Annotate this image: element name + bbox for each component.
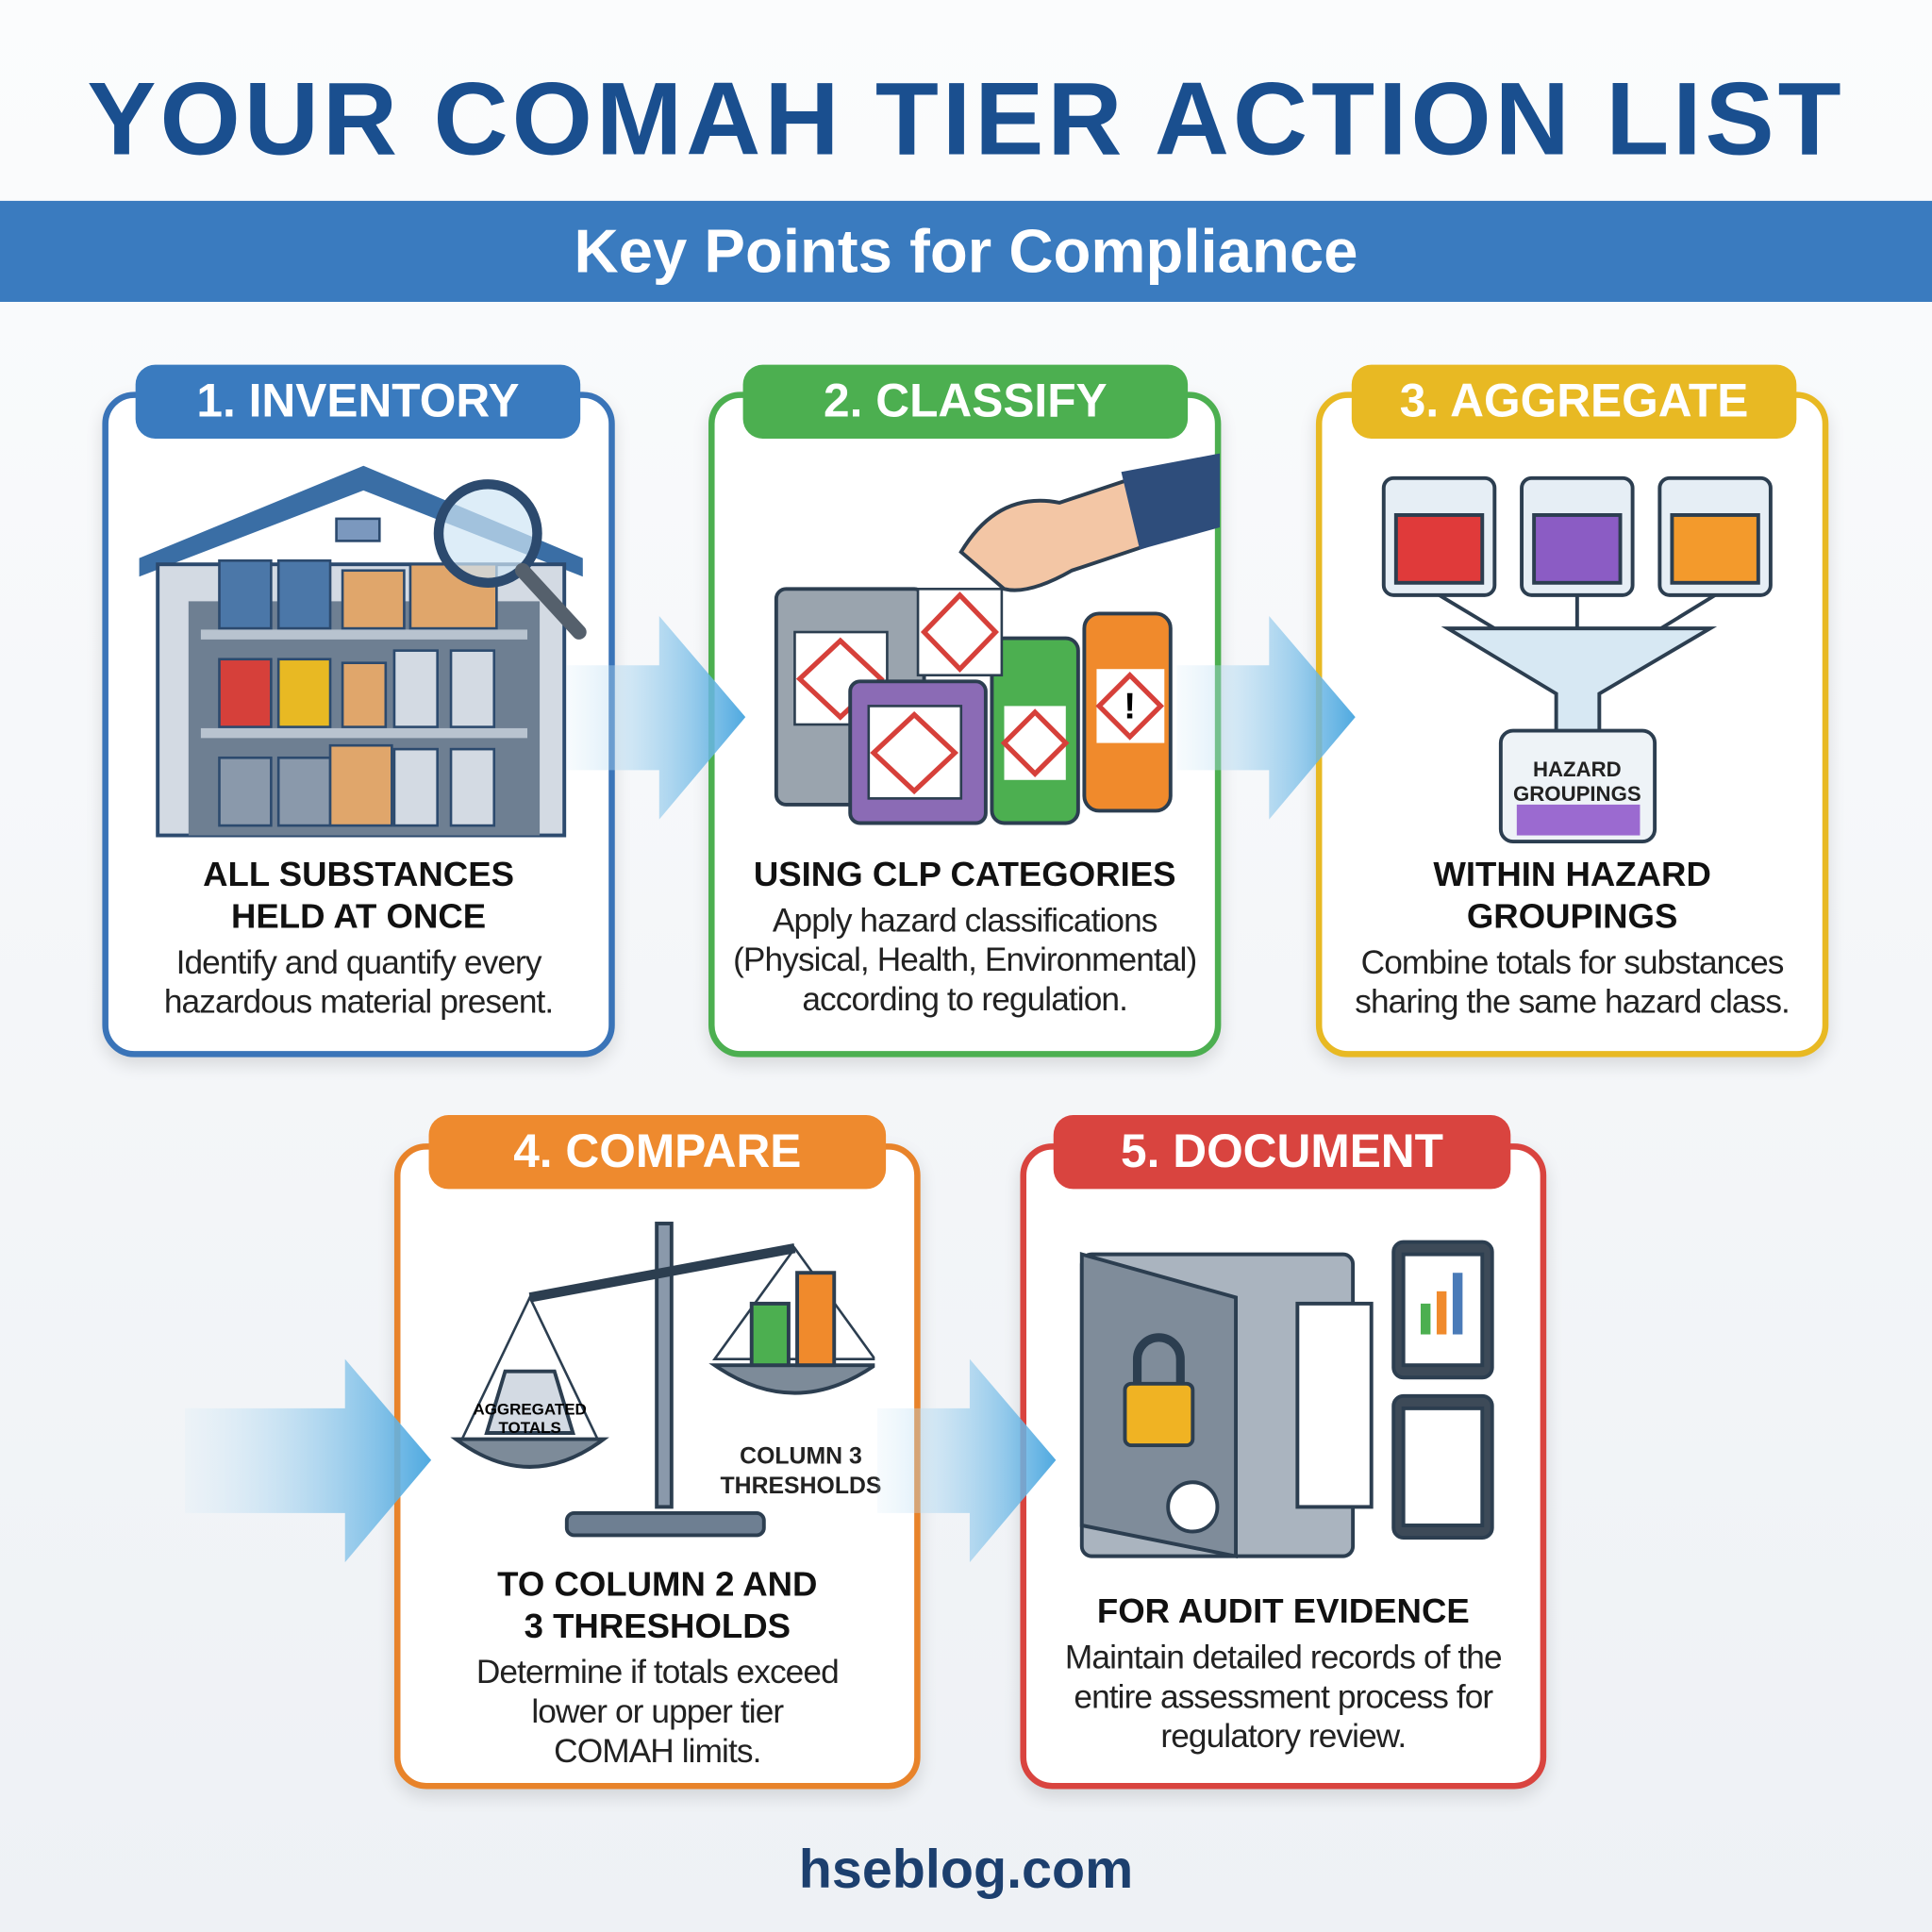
arrow: into 4 bbox=[197, 1358, 432, 1562]
subtitle band bbox=[0, 201, 1932, 302]
panel: document: entire assessment process for bbox=[1074, 1678, 1492, 1715]
panel: classify: (Physical, Health, Environmental) bbox=[733, 941, 1196, 978]
text: compare: 3 THRESHOLDS bbox=[525, 1607, 791, 1645]
label: column 3 thresholds: THRESHOLDS bbox=[720, 1474, 881, 1500]
text: inventory: ALL SUBSTANCES bbox=[203, 855, 514, 893]
panel: document: regulatory review. bbox=[1160, 1718, 1406, 1755]
tab: classify: 2. CLASSIFY bbox=[824, 375, 1108, 427]
tab: compare bbox=[429, 1115, 886, 1189]
text: compare: TO COLUMN 2 AND bbox=[497, 1565, 817, 1603]
tab: inventory: 1. INVENTORY bbox=[196, 375, 519, 427]
panel: compare: lower or upper tier bbox=[531, 1693, 783, 1730]
panel: document: Maintain detailed records of the bbox=[1065, 1639, 1502, 1675]
panel: inventory bbox=[102, 391, 615, 1058]
text: aggregate: WITHIN HAZARD bbox=[1433, 855, 1711, 893]
tab: inventory bbox=[136, 365, 580, 439]
panel: classify: Apply hazard classifications bbox=[773, 902, 1157, 939]
text: inventory: HELD AT ONCE bbox=[231, 897, 486, 935]
title: YOUR COMAH TIER ACTION LIST bbox=[87, 60, 1845, 176]
icon: scales: TOTALS bbox=[498, 1419, 561, 1437]
arrow: 2 to 3 bbox=[1177, 616, 1356, 819]
tab: classify bbox=[743, 365, 1188, 439]
tab: compare: 4. COMPARE bbox=[513, 1126, 801, 1178]
icon: CLP bottles bbox=[774, 453, 1220, 824]
panel: aggregate: Combine totals for substances bbox=[1361, 943, 1784, 981]
text: inventory bbox=[203, 855, 514, 935]
panel: classify: according to regulation. bbox=[802, 981, 1127, 1018]
tab: aggregate: 3. AGGREGATE bbox=[1400, 375, 1748, 427]
icon: CLP bottles: ! bbox=[1124, 686, 1136, 726]
icon: funnel: GROUPINGS bbox=[1513, 782, 1641, 806]
arrow: 4 to 5 bbox=[877, 1359, 1057, 1562]
footer: hseblog.com bbox=[799, 1840, 1133, 1900]
icon: warehouse bbox=[140, 466, 587, 838]
icon: documents bbox=[1079, 1240, 1494, 1558]
label: column 3 thresholds: COLUMN 3 bbox=[740, 1444, 862, 1470]
tab: document: 5. DOCUMENT bbox=[1121, 1126, 1443, 1178]
subtitle band: Key Points for Compliance bbox=[574, 217, 1357, 286]
panel: aggregate bbox=[1316, 391, 1828, 1058]
arrow: 1 to 2 bbox=[567, 616, 745, 819]
panel: inventory: Identify and quantify every bbox=[176, 943, 541, 981]
text: classify: USING CLP CATEGORIES bbox=[754, 855, 1176, 893]
panel: classify bbox=[708, 391, 1221, 1058]
text: aggregate bbox=[1433, 855, 1711, 935]
tab: aggregate bbox=[1352, 365, 1796, 439]
text: compare bbox=[497, 1565, 817, 1645]
panel: compare: Determine if totals exceed bbox=[476, 1654, 839, 1690]
label: column 3 thresholds bbox=[720, 1444, 881, 1500]
text: document: FOR AUDIT EVIDENCE bbox=[1097, 1592, 1470, 1630]
icon: scales bbox=[451, 1222, 875, 1538]
icon: scales: AGGREGATED bbox=[473, 1400, 587, 1418]
panel: compare: COMAH limits. bbox=[554, 1732, 760, 1770]
panel: aggregate: sharing the same hazard class. bbox=[1355, 983, 1790, 1020]
text: aggregate: GROUPINGS bbox=[1467, 897, 1677, 935]
icon: funnel: HAZARD bbox=[1533, 758, 1622, 781]
tab: document bbox=[1054, 1115, 1510, 1189]
icon: funnel bbox=[1381, 475, 1773, 843]
panel: inventory: hazardous material present. bbox=[164, 983, 553, 1020]
panel: compare bbox=[394, 1143, 921, 1789]
panel: document bbox=[1020, 1143, 1546, 1789]
